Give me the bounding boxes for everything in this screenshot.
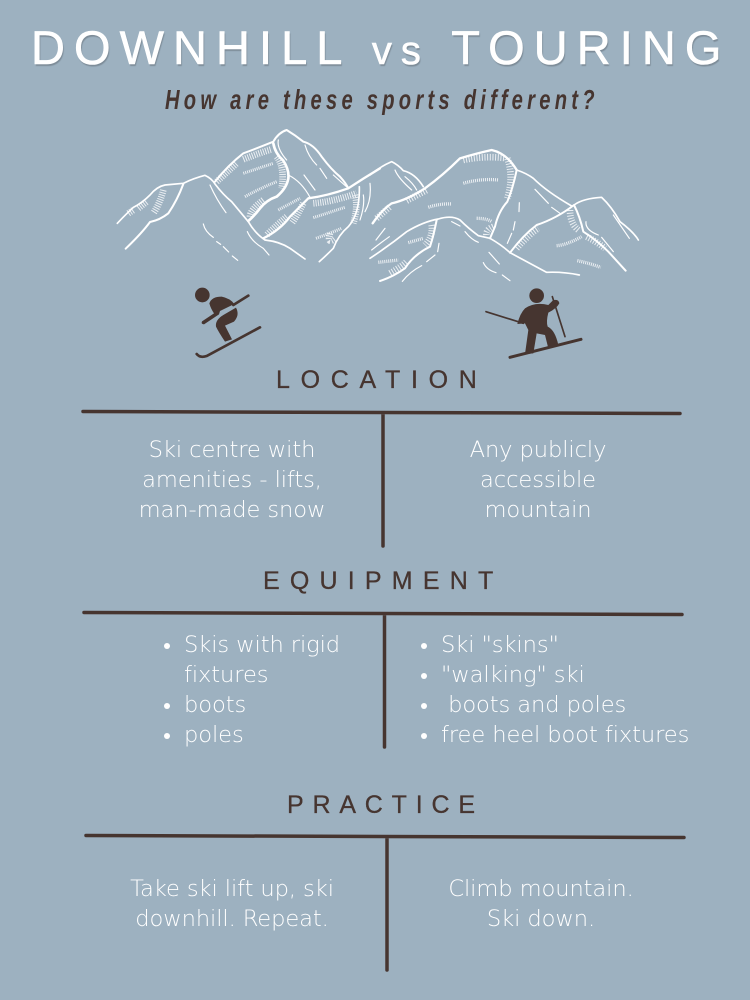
subtitle: How are these sports different?	[165, 84, 599, 115]
text: downhill location: Ski centre with	[149, 437, 315, 463]
text: downhill practice	[130, 876, 334, 932]
title: DOWNHILL vs TOURING	[31, 21, 730, 74]
text: touring location: mountain	[484, 497, 591, 523]
list: touring equipment: Ski "skins"	[441, 632, 559, 658]
list: touring equipment	[421, 632, 689, 748]
text: touring practice: Ski down.	[487, 906, 595, 932]
text: downhill location: amenities - lifts,	[142, 467, 322, 493]
list: touring equipment: free heel boot fixtures	[441, 722, 689, 748]
text: downhill location: man-made snow	[139, 497, 325, 523]
list: downhill equipment: fixtures	[184, 662, 268, 688]
text: downhill practice: downhill. Repeat.	[135, 906, 329, 932]
list: downhill equipment: boots	[184, 692, 246, 718]
list: touring equipment: boots and poles	[448, 692, 626, 718]
text: downhill location	[139, 437, 325, 523]
list: touring equipment: "walking" ski	[441, 662, 585, 688]
list: downhill equipment: poles	[184, 722, 244, 748]
heading: practice: PRACTICE	[287, 791, 484, 819]
heading: equipment: EQUIPMENT	[263, 567, 503, 595]
heading: location: LOCATION	[276, 366, 488, 394]
text: downhill practice: Take ski lift up, ski	[130, 876, 334, 902]
text: touring practice: Climb mountain.	[448, 876, 634, 902]
list: downhill equipment	[164, 632, 340, 748]
text: touring practice	[448, 876, 634, 932]
text: touring location	[470, 437, 606, 523]
list: downhill equipment: Skis with rigid	[184, 632, 340, 658]
text: touring location: Any publicly	[470, 437, 606, 463]
text: touring location: accessible	[480, 467, 596, 493]
